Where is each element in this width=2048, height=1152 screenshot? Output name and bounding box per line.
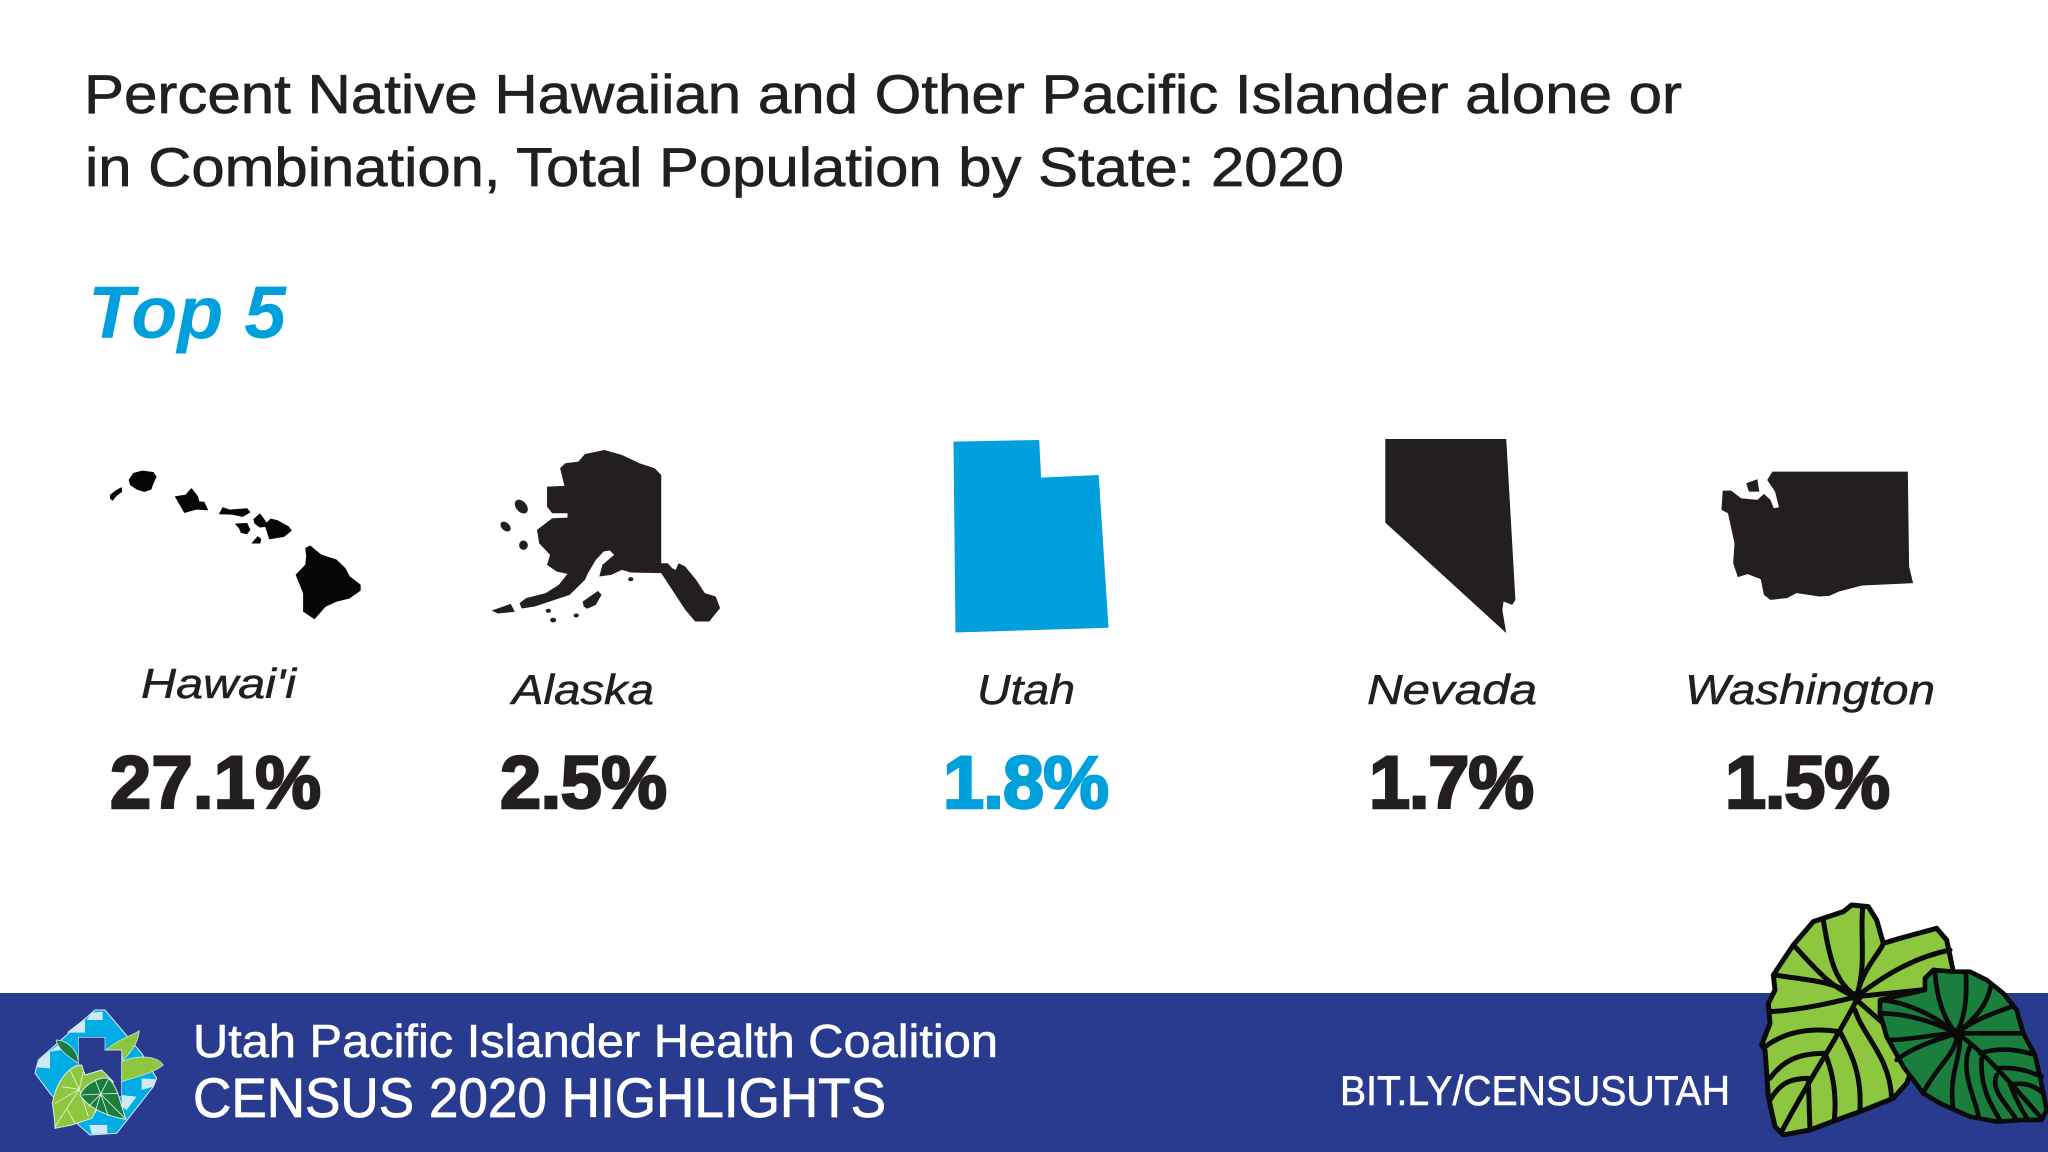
dark green leaf [1880,970,2047,1122]
title: Percent Native Hawaiian and Other Pacific Islander alone or [84,63,1682,125]
footer text: Census 2020 Highlights: CENSUS 2020 HIGHLIGHTS [193,1066,886,1129]
value: 2.5%: 2.5% [500,741,667,824]
panel: Nevada [1367,439,1537,824]
logo: Utah Pacific Islander Health Coalition [35,1010,163,1135]
icon: Washington map [1721,472,1913,600]
panel: Utah [943,440,1109,824]
icon: taro leaves [1762,905,2047,1135]
icon: Nevada map [1385,439,1515,633]
value: 1.5%: 1.5% [1725,741,1890,824]
title [84,63,1682,198]
icon: Hawai'i map [110,471,360,619]
footer text: coalition name: Utah Pacific Islander Health Coalition [193,1015,998,1067]
label: Nevada: Nevada [1367,666,1537,713]
value: 27.1%: 27.1% [110,741,321,824]
label: Utah: Utah [977,666,1075,713]
label: Hawai'i: Hawai'i [141,660,298,707]
title: in Combination, Total Population by State: 2020 [85,136,1344,198]
value: 1.8%: 1.8% [943,741,1109,824]
label: Alaska: Alaska [509,666,654,713]
icon: Alaska map [492,450,720,622]
label: Washington: Washington [1685,666,1935,713]
panel: Washington [1685,472,1935,824]
heading: Top 5: Top 5 [88,271,288,354]
panel: Alaska [492,450,720,824]
footer band [0,993,2048,1152]
panel: Hawai'i [110,471,360,824]
footer text: link: BIT.LY/CENSUSUTAH [1340,1067,1730,1114]
light green leaf [1762,905,1953,1135]
value: 1.7%: 1.7% [1369,741,1534,824]
icon: Utah map [954,440,1109,632]
